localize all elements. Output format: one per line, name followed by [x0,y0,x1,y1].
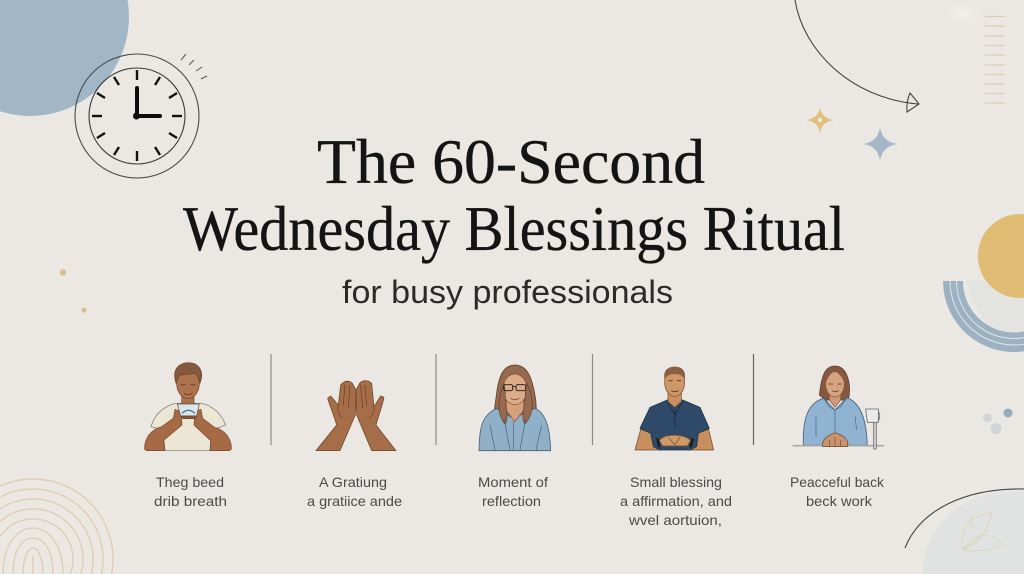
decorative blue circle top-left [0,0,129,116]
decorative ruled lines [985,16,1005,103]
step 4: man in navy polo [635,367,714,450]
step 5 label: Peacceful back [790,474,885,490]
step 2: praying hands [316,381,396,451]
icon: blue sparkle [863,127,898,161]
step 5 label: beck work [806,493,873,509]
step 3 label [478,474,548,509]
step 1 label: drib breath [154,493,227,509]
step 3 label: Moment of [478,474,548,490]
title: The 60-Second [317,127,705,197]
step 2 label: A Gratiung [319,474,387,490]
step 1 label [154,474,227,509]
step 4 label: a affirmation, and [620,493,732,509]
step 5: woman at a desk [793,366,884,449]
icon: gold sparkle [806,107,834,134]
step 2 label: a gratiice ande [307,493,402,509]
subtitle: for busy professionals [342,274,673,310]
step 3: woman with glasses [479,365,551,451]
arrow: curved top-right arrow [795,0,919,112]
title: Wednesday Blessings Ritual [183,194,845,264]
decorative sun and rainbow arc [943,214,1024,352]
title [183,127,845,264]
dividers [271,354,754,445]
step 5 label [790,474,885,509]
icon: clock [75,54,207,178]
decorative corner bottom-right with leaf [905,489,1024,574]
decorative dots left [60,269,87,313]
step 2 label [307,474,402,509]
step 1 label: Theg beed [156,474,224,490]
decorative concentric rings bottom-left [0,479,113,574]
step 4 label: Small blessing [630,474,722,490]
decorative dots right [983,408,1012,434]
step 3 label: reflection [482,493,541,509]
step 1: person holding a bowl [145,363,231,451]
step 4 label: wvel aortuion, [628,512,722,528]
step 4 label [620,474,732,528]
